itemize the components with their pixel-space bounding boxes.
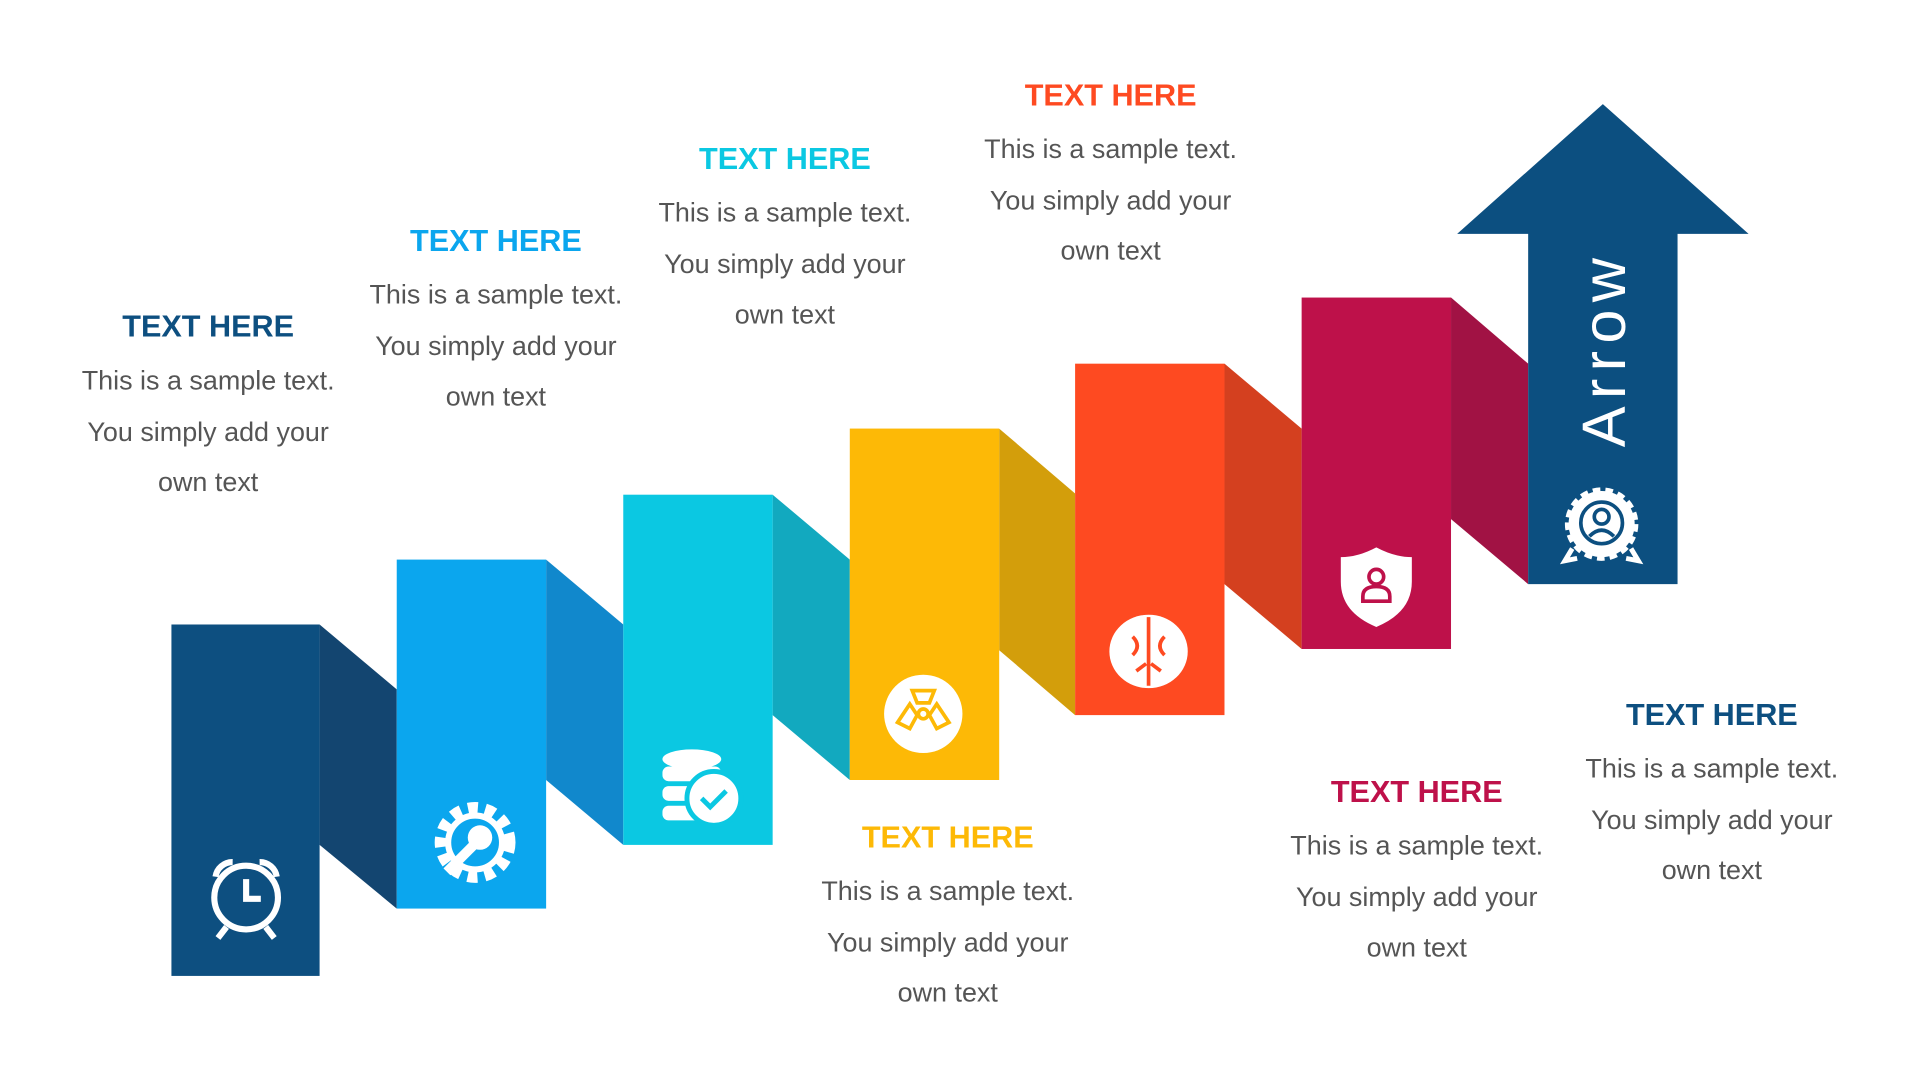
text block 4: own text (898, 978, 998, 1008)
text block 6: This is a sample text. (1290, 831, 1543, 861)
text block 2: TEXT HERE (410, 224, 582, 258)
arrow (1457, 104, 1749, 584)
text block 6: TEXT HERE (1331, 775, 1503, 809)
text block 4 (821, 820, 1074, 1008)
text block 1: TEXT HERE (122, 310, 294, 344)
text block 6 (1290, 775, 1543, 962)
step 1 bar (171, 624, 397, 976)
text block 2 (369, 224, 622, 411)
icon: shield person (1341, 547, 1412, 627)
text block 2: own text (446, 381, 547, 411)
text block 3: This is a sample text. (658, 198, 911, 228)
text block 5: This is a sample text. (984, 134, 1237, 164)
step 4 bar (850, 429, 1075, 780)
text block 5: You simply add your (990, 185, 1231, 215)
icon: database check (662, 749, 741, 825)
text block 5 (984, 78, 1237, 266)
text block 7 (1585, 698, 1838, 885)
arrow label: Arrow (1570, 251, 1638, 447)
text block 6: own text (1367, 932, 1467, 962)
icon: alarm clock (214, 862, 278, 938)
text block 7: This is a sample text. (1585, 754, 1838, 784)
text block 1: This is a sample text. (82, 365, 335, 395)
text block 3: You simply add your (664, 249, 906, 279)
text block 5: own text (1060, 236, 1161, 266)
text block 1: You simply add your (87, 417, 329, 447)
text block 1: own text (158, 467, 259, 497)
text block 2: This is a sample text. (369, 280, 622, 310)
text block 3 (658, 142, 911, 329)
text block 4: This is a sample text. (821, 876, 1074, 906)
text block 7: You simply add your (1591, 805, 1833, 835)
icon: gear wrench (441, 808, 509, 877)
text block 4: TEXT HERE (862, 820, 1034, 854)
icon: badge (1565, 491, 1638, 561)
text block 7: own text (1662, 855, 1762, 885)
step 5 bar (1075, 364, 1302, 715)
text block 3: own text (735, 299, 836, 329)
step 3 bar (623, 495, 850, 845)
step 6 bar (1302, 298, 1528, 649)
text block 2: You simply add your (375, 331, 617, 361)
text block 4: You simply add your (827, 927, 1069, 957)
step 2 bar (397, 560, 623, 909)
icon: brain (1109, 615, 1188, 688)
icon: radiation (884, 675, 962, 753)
text block 6: You simply add your (1296, 882, 1537, 912)
text block 5: TEXT HERE (1025, 78, 1197, 112)
text block 1 (82, 310, 335, 497)
text block 7: TEXT HERE (1626, 698, 1798, 732)
text block 3: TEXT HERE (699, 142, 871, 176)
